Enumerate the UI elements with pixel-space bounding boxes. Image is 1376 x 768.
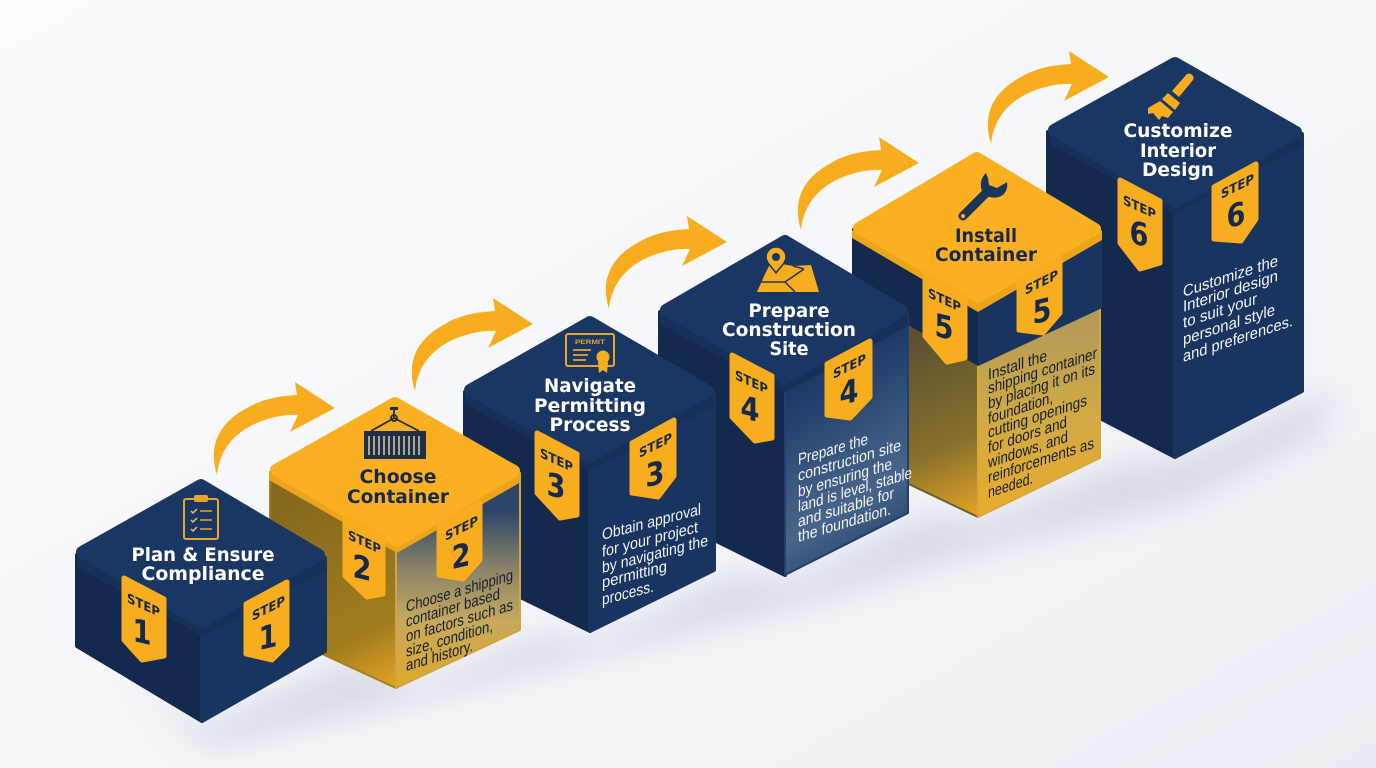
description — [987, 330, 1097, 502]
left face — [465, 392, 590, 631]
left tag — [925, 273, 965, 362]
right face — [1175, 134, 1302, 457]
top face — [276, 403, 514, 541]
left tag: STEP — [735, 368, 768, 398]
left tag: 1 — [133, 612, 151, 654]
right tag: 6 — [1227, 195, 1245, 237]
icon: clipboard — [184, 495, 218, 539]
description: permitting — [602, 557, 667, 592]
step 4 box — [660, 241, 912, 575]
description: Choose a shipping — [406, 566, 513, 616]
left face — [77, 555, 202, 721]
left tag — [1120, 180, 1160, 269]
description: and suitable for — [798, 484, 894, 531]
title: Plan & Ensure — [132, 544, 274, 566]
left tag: 4 — [741, 389, 759, 431]
left face — [1048, 132, 1175, 457]
title: Permitting — [534, 395, 646, 417]
title: Interior — [1140, 140, 1217, 162]
right tag — [246, 582, 287, 660]
top lip — [269, 472, 521, 553]
title: Customize — [1124, 120, 1232, 142]
left tag — [124, 578, 164, 660]
step 6 box — [1048, 63, 1302, 457]
left tag — [345, 515, 383, 597]
left tag: 6 — [1130, 214, 1148, 256]
description: personal style — [1183, 301, 1275, 349]
description: to suit your — [1183, 290, 1257, 332]
top lip — [660, 312, 908, 392]
description — [798, 417, 912, 546]
arrow 5 to 6 — [988, 51, 1109, 144]
step 5 box — [852, 158, 1102, 517]
description: and preferences. — [1183, 312, 1293, 366]
description — [602, 499, 708, 609]
right face — [785, 314, 908, 575]
title: Container — [935, 244, 1038, 266]
description: land is level, stable — [798, 464, 912, 516]
icon: permit certificate: PERMIT — [575, 339, 605, 346]
arrow 1 to 2 — [214, 382, 335, 475]
description: needed. — [988, 470, 1033, 502]
title: Process — [550, 414, 630, 436]
icon: wrench — [961, 173, 1007, 218]
description — [406, 566, 513, 675]
arrow 2 to 3 — [412, 298, 533, 391]
left tag: STEP — [127, 591, 160, 621]
description: on factors such as — [406, 596, 513, 646]
left tag: STEP — [540, 446, 573, 476]
right tag: STEP — [639, 430, 672, 462]
top lip — [465, 392, 714, 470]
description: shipping container — [988, 344, 1097, 398]
title: Construction — [722, 319, 856, 341]
top lip — [1050, 132, 1300, 214]
description: process. — [602, 578, 654, 609]
left tag: 5 — [935, 307, 953, 349]
arrow 3 to 4 — [606, 216, 727, 309]
icon: map pin — [757, 247, 819, 292]
description: for doors and — [988, 413, 1067, 457]
navy band — [852, 228, 1102, 366]
arrow 4 to 5 — [798, 137, 919, 230]
icon: paint brush — [1148, 74, 1193, 120]
description: construction site — [798, 436, 901, 485]
right tag: STEP — [445, 513, 478, 545]
title: Compliance — [142, 563, 264, 585]
right face — [590, 394, 714, 631]
left tag: STEP — [1123, 193, 1156, 223]
top lip — [77, 555, 325, 636]
right tag — [1214, 164, 1256, 241]
right tag: 3 — [646, 454, 664, 496]
top face — [859, 158, 1095, 297]
right tag: STEP — [833, 351, 866, 383]
right tag: 1 — [259, 617, 277, 659]
description: Customize the — [1183, 252, 1278, 301]
left face — [660, 312, 785, 575]
top face — [666, 241, 902, 378]
description: by navigating the — [602, 532, 708, 577]
description: Obtain approval — [602, 500, 701, 544]
top face — [82, 485, 319, 622]
description: reinforcements as — [988, 434, 1094, 487]
icon: container on crane — [364, 407, 426, 459]
right tag: 5 — [1033, 291, 1051, 333]
title: Prepare — [748, 300, 830, 322]
top face — [470, 322, 708, 456]
description: cutting openings — [988, 392, 1087, 442]
title: Site — [770, 338, 808, 360]
right tag — [439, 503, 480, 579]
description: and history. — [406, 637, 473, 675]
description: Interior design — [1183, 267, 1278, 316]
right face — [396, 474, 520, 688]
top lip — [852, 230, 1102, 312]
description: size, condition, — [406, 617, 493, 661]
description: windows, and — [987, 428, 1068, 472]
right tag: STEP — [1025, 267, 1058, 299]
left tag — [732, 355, 772, 441]
step 3 box — [465, 322, 714, 631]
title: Container — [347, 486, 450, 508]
description: foundation, — [988, 389, 1053, 428]
title: Navigate — [544, 375, 636, 397]
right tag — [632, 420, 674, 497]
left tag: 3 — [547, 466, 565, 508]
title: Choose — [360, 466, 436, 488]
right tag — [827, 341, 870, 418]
right tag: STEP — [1221, 171, 1254, 203]
description: Install the — [988, 347, 1047, 384]
left tag: STEP — [928, 286, 961, 316]
title: Install — [955, 225, 1017, 247]
right tag: 2 — [452, 536, 470, 578]
title: Design — [1142, 159, 1214, 181]
description: container based — [406, 585, 500, 631]
left tag: STEP — [348, 528, 381, 558]
step 1 box — [77, 485, 325, 721]
description: for your project — [602, 518, 698, 561]
description: by ensuring the — [798, 455, 892, 501]
left tag: 2 — [353, 548, 371, 590]
description: Prepare the — [798, 430, 868, 469]
top face — [1054, 63, 1296, 202]
right tag: 4 — [840, 372, 858, 414]
left tag — [537, 433, 577, 518]
left face — [854, 230, 978, 517]
step 2 box — [269, 403, 521, 688]
description: by placing it on its — [988, 360, 1095, 413]
description — [1183, 247, 1293, 366]
description: the foundation. — [798, 500, 891, 546]
floor shadows — [110, 395, 1325, 750]
right face — [202, 558, 325, 721]
left face — [270, 472, 396, 688]
right tag — [1019, 258, 1060, 333]
icon: permit certificate — [566, 334, 614, 373]
right face — [978, 232, 1100, 517]
right tag: STEP — [252, 593, 285, 625]
